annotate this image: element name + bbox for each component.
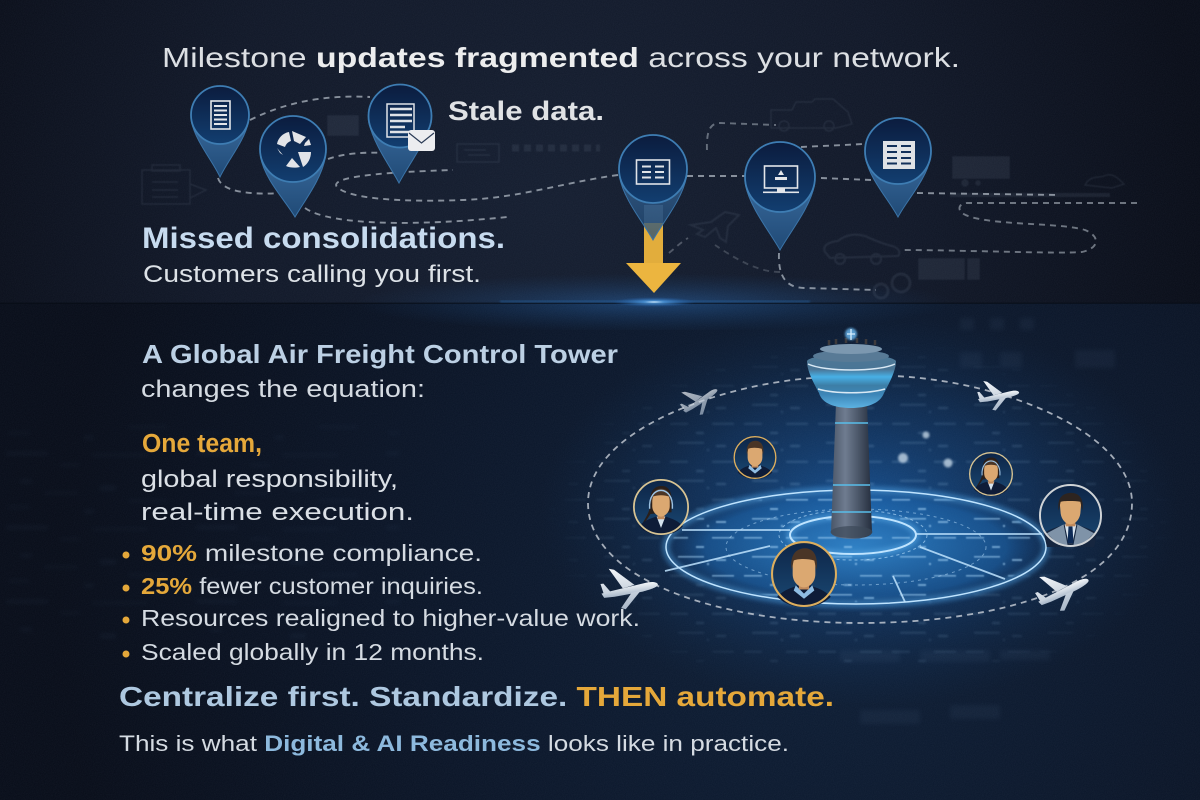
icon: form: [457, 144, 499, 162]
icon: small cargo: [1085, 175, 1124, 188]
pin: data grid: [865, 118, 931, 217]
plane: bottom right: [1030, 561, 1096, 618]
icon: clipboard: [142, 165, 206, 204]
pin: table card: [619, 135, 687, 240]
icon: report: [387, 104, 414, 137]
icon: wheel: [874, 274, 910, 298]
bullet: 25 percent: 25% fewer customer inquiries.: [141, 573, 483, 599]
avatar: top left: [734, 437, 776, 479]
bullet: resources: Resources realigned to higher-value work.: [141, 605, 640, 631]
text: customers calling: Customers calling you first.: [143, 261, 481, 288]
arrow: down to solution: [626, 205, 681, 293]
plane: top right: [976, 377, 1021, 412]
heading: problem statement: Milestone updates fragmented across your network.: [162, 42, 960, 73]
dashed orbit: [588, 376, 1132, 623]
background: upper section: [0, 0, 1200, 304]
text: real-time execution: real-time execution.: [141, 499, 414, 526]
icon: container: [953, 157, 1009, 186]
text: stale data: Stale data.: [448, 96, 604, 126]
text: closing line: This is what Digital & AI Readiness looks like in practice.: [119, 731, 789, 756]
dashed route lines: [218, 97, 1137, 290]
icon: counter: [919, 259, 979, 279]
horizon flare: [0, 297, 1200, 307]
icon: broken wheel: [277, 131, 311, 168]
background: glow behind control tower: [500, 303, 1200, 703]
bullet: scaled: Scaled globally in 12 months.: [141, 639, 484, 665]
icon: table card: [636, 160, 670, 184]
control tower scene: [587, 326, 1133, 662]
pin: monitor: [745, 142, 815, 250]
icon: car: [824, 235, 899, 264]
ghost logistics icons: [142, 99, 1124, 298]
city lights ground: [598, 370, 1126, 662]
ghost text row: [512, 144, 600, 152]
avatar: left headset: [634, 480, 688, 535]
icon: ghost plane: [691, 212, 739, 242]
background: dim grid lights: [840, 318, 1115, 724]
avatar: top right: [970, 453, 1012, 496]
radar lights: [671, 492, 1041, 602]
icon: envelope: [408, 130, 435, 151]
avatar: right: [1040, 485, 1101, 547]
radar rings: [665, 490, 1046, 604]
background: lower section: [0, 303, 1200, 800]
heading: control tower: A Global Air Freight Control Tower: [142, 339, 618, 369]
pin: report with envelope: [368, 84, 435, 183]
text: missed consolidations: Missed consolidations.: [142, 222, 505, 255]
avatar: bottom: [772, 542, 836, 607]
icon: rail line: [950, 193, 1110, 197]
pin: document: [191, 86, 249, 177]
icon: truck: [771, 99, 852, 131]
tower: [807, 328, 896, 539]
icon: data grid: [883, 141, 915, 169]
text: centralize first: Centralize first. Standardize. THEN automate.: [119, 681, 834, 712]
glow dots: [898, 432, 952, 468]
plane: top left: [675, 377, 724, 422]
background: horizon glow: [350, 270, 960, 330]
text: global responsibility: global responsibility,: [141, 466, 398, 493]
icon: calendar: [328, 116, 358, 135]
radar glow: [656, 481, 1056, 613]
background: dim lights lower left: [0, 420, 400, 640]
bullet: 90 percent: 90% milestone compliance.: [141, 540, 482, 566]
plane: bottom left: [599, 564, 660, 612]
text: one team: One team,: [142, 430, 262, 458]
bullet list: [122, 540, 640, 665]
text: changes the equation: changes the equation:: [141, 376, 425, 403]
icon: monitor: [763, 166, 799, 193]
icon: list document: [211, 101, 230, 129]
pin: data wheel: [260, 116, 326, 217]
